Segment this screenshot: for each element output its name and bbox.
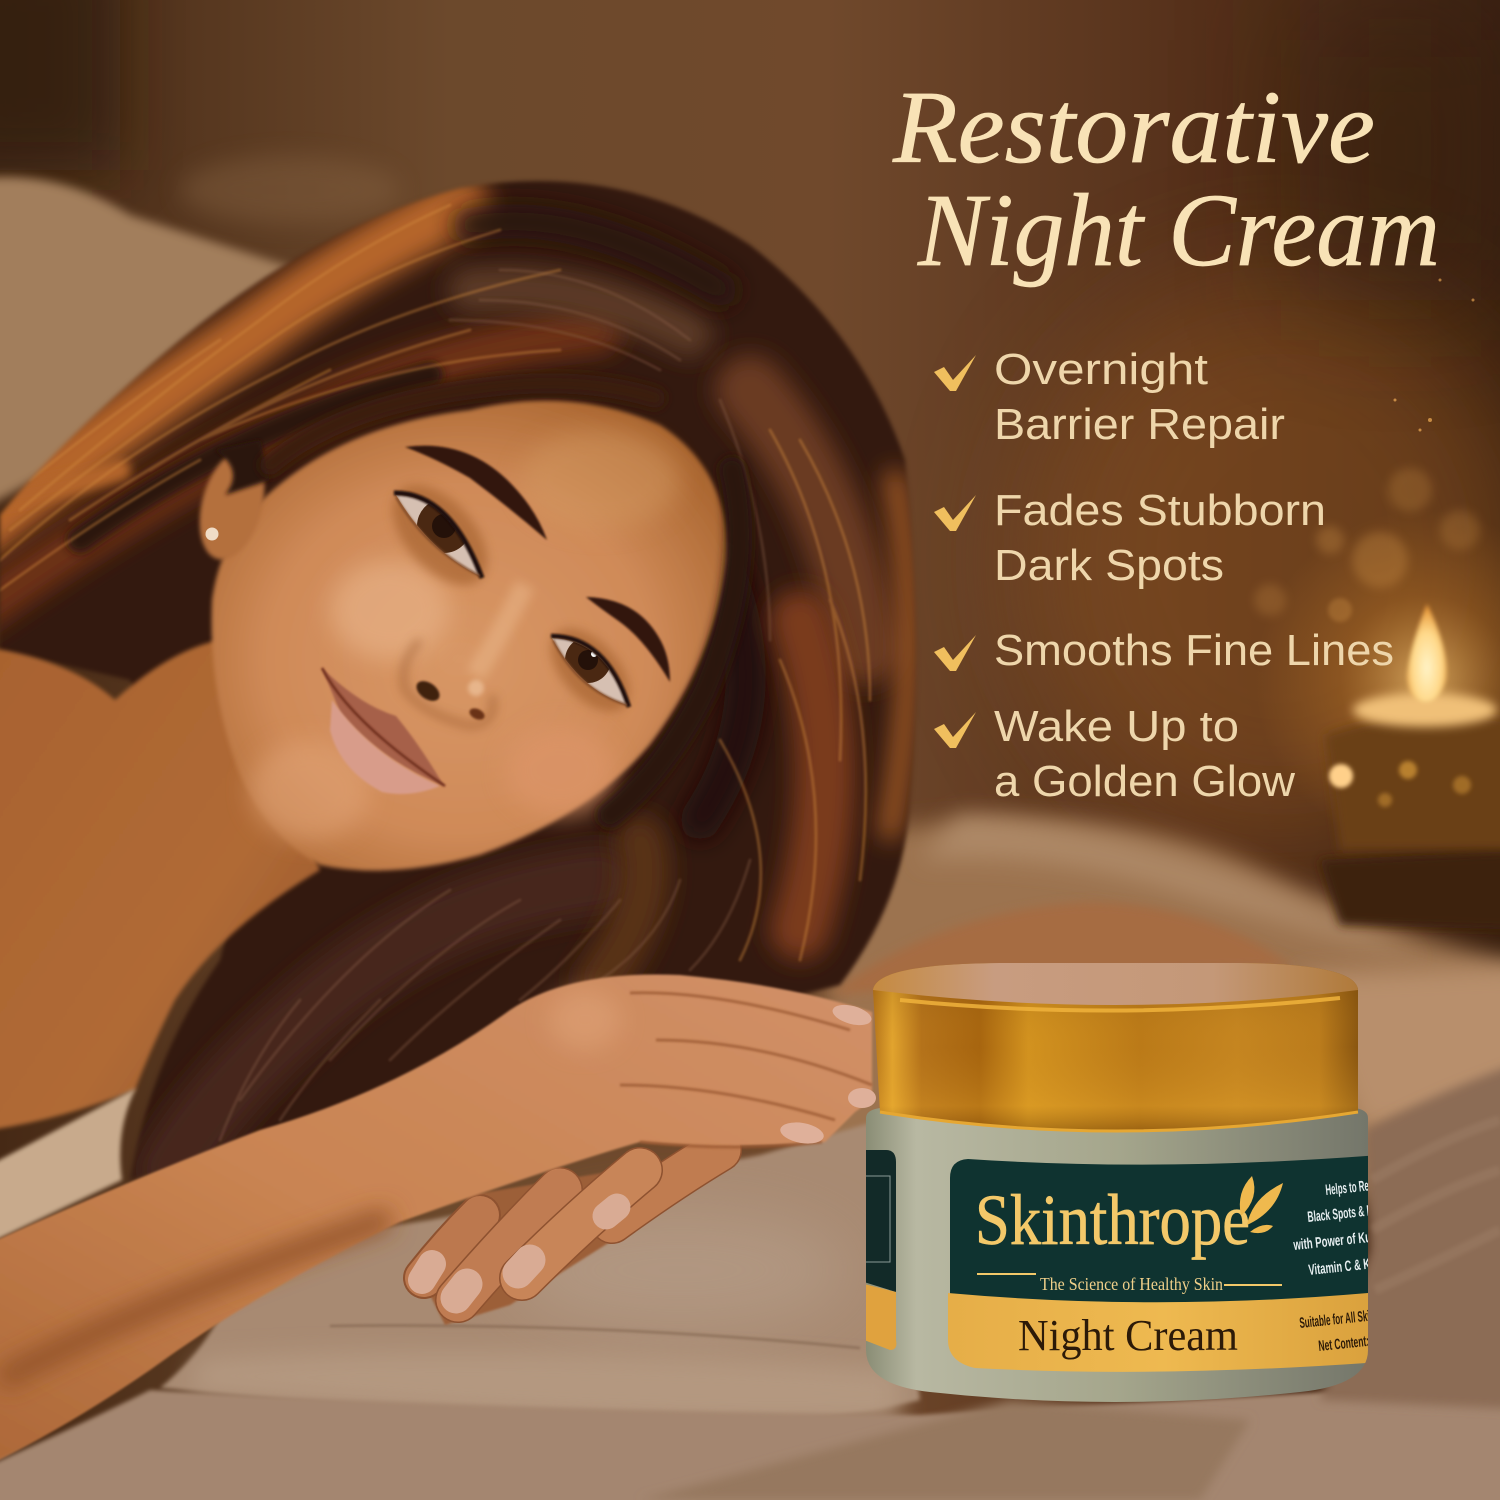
subject: woman resting on a pillow xyxy=(0,150,930,1465)
benefit: golden glow: Wake Up to xyxy=(994,702,1239,751)
benefit: overnight barrier repair: Overnight xyxy=(994,345,1208,394)
brand leaf xyxy=(1240,1176,1283,1233)
nose xyxy=(403,585,525,726)
benefit: overnight barrier repair: Barrier Repair xyxy=(994,400,1285,449)
bed: pillows and linen behind the subject xyxy=(0,177,1500,1200)
title xyxy=(892,70,1440,288)
label claims: Vitamin C & Kojic xyxy=(1308,1254,1387,1279)
eye sockets xyxy=(375,468,505,602)
label gold panel xyxy=(948,1292,1380,1372)
pillow under the arm xyxy=(160,1120,920,1425)
eyebrow left xyxy=(405,446,547,540)
bokeh sparkles xyxy=(1254,278,1480,622)
label net contents: Net Content: 50 g xyxy=(1318,1331,1389,1355)
label claims: Black Spots & Marks xyxy=(1307,1200,1392,1226)
jar lid xyxy=(873,963,1358,1131)
arm and upper hand xyxy=(0,974,876,1465)
blanket in the foreground xyxy=(0,1055,1500,1500)
label claims: Helps to Reduce xyxy=(1325,1176,1388,1199)
eye right xyxy=(550,630,630,710)
sheet xyxy=(0,1088,136,1243)
shoulder and neck xyxy=(0,640,320,1130)
benefit: fades dark spots xyxy=(934,486,1326,590)
label net contents: Suitable for All Skin Types xyxy=(1299,1305,1400,1332)
ear and earring xyxy=(189,443,275,567)
lips xyxy=(322,668,445,794)
tagline xyxy=(977,1274,1282,1294)
benefit: smooths fine lines: Smooths Fine Lines xyxy=(994,626,1394,675)
front locks around cheek xyxy=(270,383,739,815)
tagline: The Science of Healthy Skin xyxy=(1040,1274,1223,1294)
label product name: Night Cream xyxy=(1018,1311,1238,1360)
title: Restorative xyxy=(892,70,1375,185)
benefit: golden glow: a Golden Glow xyxy=(994,757,1295,806)
product: Skinthrope night cream jar xyxy=(864,963,1414,1402)
label claims xyxy=(1293,1180,1368,1275)
benefit: fades dark spots: Dark Spots xyxy=(994,541,1224,590)
label green panel xyxy=(950,1155,1380,1302)
label net contents xyxy=(1300,1310,1368,1351)
jar glass xyxy=(866,1108,1368,1402)
eyebrow right xyxy=(586,597,670,682)
hair mass with highlights xyxy=(0,150,930,1200)
brand name: Skinthrope xyxy=(975,1180,1250,1260)
side label xyxy=(864,1150,896,1350)
benefit: fades dark spots: Fades Stubborn xyxy=(994,486,1326,535)
label claims: with Power of Kumkumadi xyxy=(1292,1225,1414,1254)
eye left xyxy=(390,490,485,580)
lower hand fingers xyxy=(422,1150,740,1325)
benefit: golden glow xyxy=(934,702,1295,806)
title: Night Cream xyxy=(917,173,1440,288)
benefit: overnight barrier repair xyxy=(934,345,1285,449)
background arm on the bed xyxy=(830,902,1292,995)
candle xyxy=(1255,510,1500,930)
face xyxy=(189,400,728,871)
